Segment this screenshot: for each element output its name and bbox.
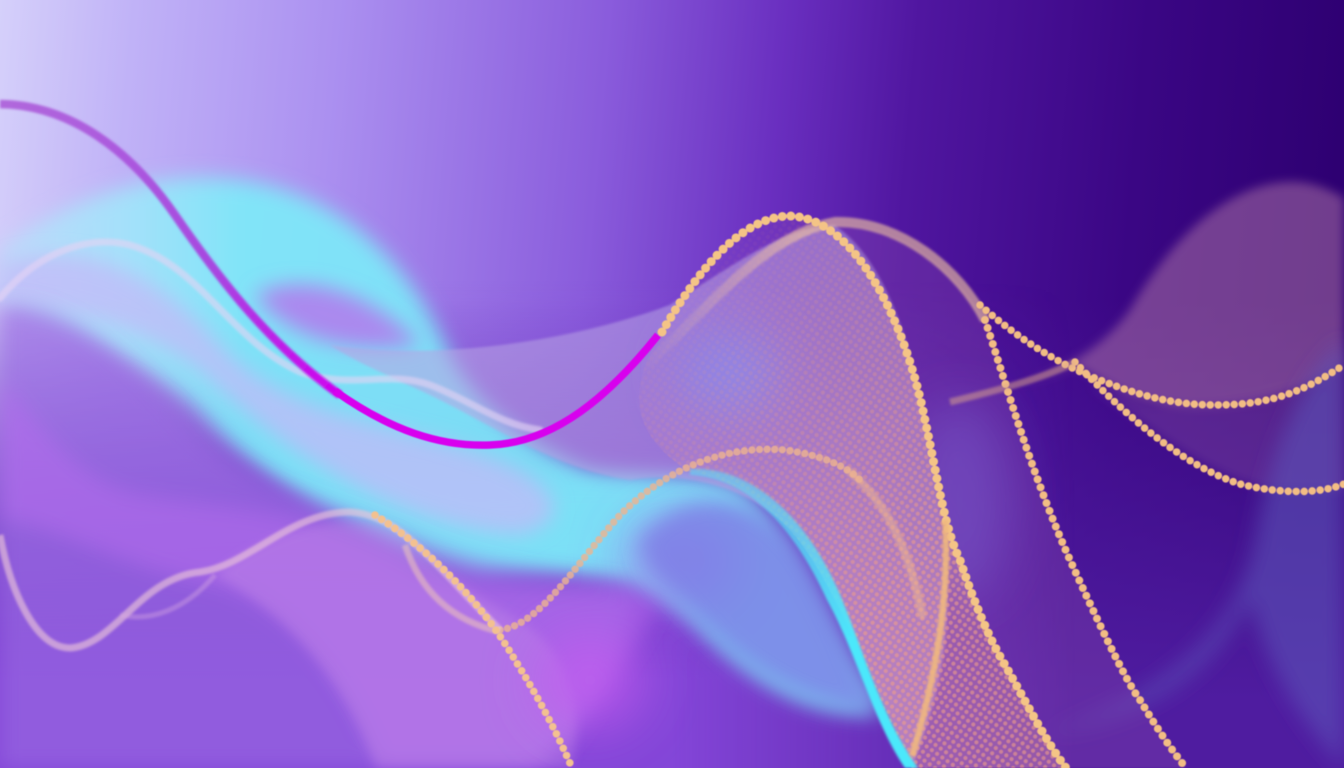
lower background shading right: [0, 300, 1344, 768]
blue glow centre: [680, 335, 1010, 600]
peach wave middle: [500, 449, 922, 630]
pale wave lower left: [0, 512, 500, 648]
mesh panel centre right: [639, 216, 1066, 768]
faded peach rear line crest: [640, 222, 985, 370]
lower background shading left: [0, 319, 979, 768]
translucent sheet centre: [330, 225, 947, 768]
mesh panel right of crest: [835, 225, 1186, 768]
blue glow right: [1040, 340, 1344, 768]
inner line down from crest: [912, 520, 946, 756]
bead lines right crossing: [950, 305, 1344, 492]
bead line to bottom: [375, 515, 572, 768]
cyan flowing ribbon: [0, 178, 880, 713]
bead line long right: [985, 320, 1186, 768]
cyan tapered line: [690, 469, 918, 768]
purple to magenta curve: [0, 104, 658, 445]
magenta glow: [535, 510, 740, 730]
lilac centre of cyan ribbon: [0, 255, 554, 535]
pink translucent ribbon bottom: [215, 522, 576, 768]
rear right translucent wave: [950, 182, 1344, 490]
bead line crest to bottom: [662, 216, 1066, 768]
violet wave lower left: [0, 305, 660, 768]
blue lobe centre: [640, 501, 880, 712]
faint wave line top left: [0, 242, 540, 430]
cyan ribbon lower body: [200, 400, 740, 570]
